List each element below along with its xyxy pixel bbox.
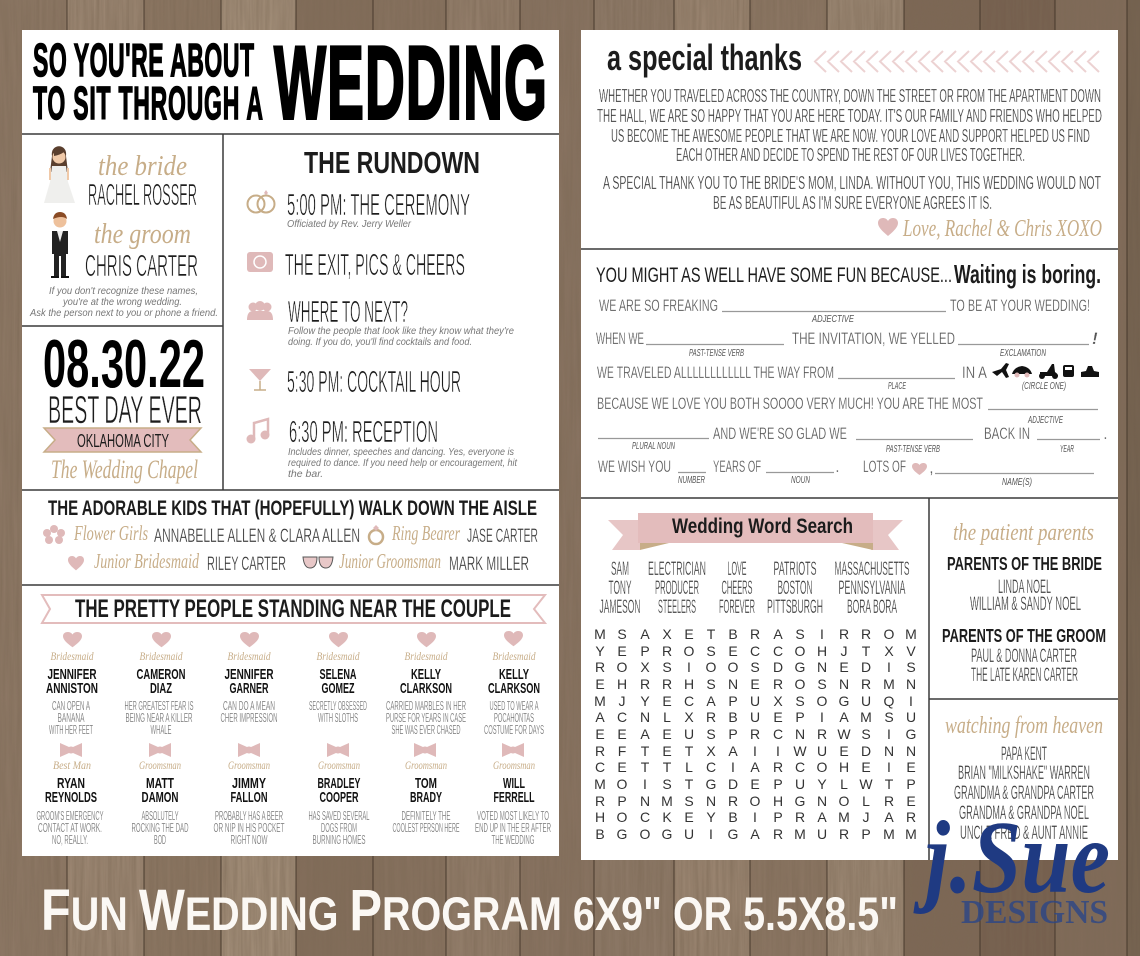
groomsman card 1: BOD bbox=[154, 833, 166, 847]
best man card: NO, REALLY. bbox=[52, 833, 88, 847]
icon: camera bbox=[247, 252, 273, 272]
bridesmaid card 2: CAMERON bbox=[136, 666, 186, 683]
bridesmaid card 4: Bridesmaid bbox=[316, 649, 360, 663]
line 5: PLURAL NOUN bbox=[632, 441, 675, 452]
panel: kids: JASE CARTER bbox=[467, 526, 538, 547]
bridesmaid card 1: WITH HER FEET bbox=[49, 723, 93, 737]
flower girls: Flower Girls bbox=[73, 521, 148, 545]
panel: wedding party: PURSE FOR YEARS IN CASE bbox=[386, 711, 466, 725]
thanks to mom bbox=[603, 173, 1101, 213]
panel: the rundown: 5:30 PM: COCKTAIL HOUR bbox=[287, 364, 461, 399]
groomsman card 1: MATT bbox=[146, 775, 174, 792]
line 5: AND WE'RE SO GLAD WE bbox=[713, 424, 847, 443]
panel: the rundown: 5:00 PM: THE CEREMONY bbox=[287, 187, 470, 222]
letter grid: ACNLXRBUEPIAMSU bbox=[595, 709, 916, 725]
line 2: EXCLAMATION bbox=[1000, 348, 1047, 359]
panel: the rundown: 6:30 PM: RECEPTION bbox=[289, 414, 438, 449]
groomsman card 5 bbox=[475, 743, 551, 847]
icon: flower bbox=[43, 525, 65, 544]
bridesmaid card 6: CLARKSON bbox=[488, 680, 540, 697]
panel: wedding party: GROOM'S EMERGENCY bbox=[36, 809, 104, 823]
line 2 bbox=[596, 329, 1098, 359]
reception note: the bar. bbox=[288, 468, 323, 480]
groomsman card 3: Groomsman bbox=[318, 758, 360, 772]
icon: heart bbox=[878, 218, 898, 236]
best man card: CONTACT AT WORK. bbox=[38, 821, 102, 835]
line 6: NAME(S) bbox=[1002, 477, 1032, 488]
line 3: (CIRCLE ONE) bbox=[1022, 381, 1066, 392]
junior bridesmaid: Junior Bridesmaid bbox=[94, 549, 199, 573]
title: WEDDING bbox=[274, 25, 547, 141]
line 6: . bbox=[835, 457, 840, 476]
bridesmaid card 3: CAN DO A MEAN bbox=[223, 699, 275, 713]
panel: mad libs bbox=[596, 259, 1108, 488]
title: TO SIT THROUGH A bbox=[33, 77, 263, 129]
heading: a special thanks bbox=[607, 37, 802, 78]
fill-in lines bbox=[598, 312, 1100, 474]
panel: left program page: RACHEL ROSSER bbox=[88, 177, 197, 212]
panel: wedding party: COOLEST PERSON HERE bbox=[392, 821, 460, 835]
letter grid bbox=[594, 626, 917, 842]
groomsman card 1: Groomsman bbox=[139, 758, 181, 772]
icon: martini bbox=[249, 369, 271, 390]
bridesmaid card 5: KELLY bbox=[411, 666, 441, 683]
heading: the patient parents bbox=[953, 520, 1094, 546]
line 2: THE INVITATION, WE YELLED bbox=[792, 329, 955, 348]
panel: right program page bbox=[581, 30, 1118, 860]
line 2: WHEN WE bbox=[596, 329, 644, 348]
groomsman card 2: JIMMY bbox=[232, 775, 266, 792]
word list: LOVE bbox=[728, 559, 746, 580]
bridesmaid card 6: USED TO WEAR A bbox=[490, 699, 539, 713]
groomsman card 2 bbox=[214, 743, 285, 847]
line 1: ADJECTIVE bbox=[811, 314, 854, 325]
icon: people bbox=[247, 301, 273, 320]
bridesmaid card 6: POCAHONTAS bbox=[494, 711, 534, 725]
line 2: PAST-TENSE VERB bbox=[689, 348, 744, 359]
panel: special thanks bbox=[597, 37, 1102, 242]
word list bbox=[600, 559, 910, 618]
groomsman card 3 bbox=[308, 743, 370, 847]
parents of the bride bbox=[947, 554, 1102, 615]
panel: wedding party: PROBABLY HAS A BEER bbox=[215, 809, 283, 823]
the bride label: the bride bbox=[98, 151, 187, 182]
panel: wedding party: CARRIED MARBLES IN HER bbox=[386, 699, 466, 713]
chevron row bbox=[815, 51, 1099, 72]
bridesmaid card 2: BEING NEAR A KILLER bbox=[126, 711, 192, 725]
line 2: ! bbox=[1092, 329, 1098, 348]
couple note bbox=[29, 285, 218, 319]
icon: bride bbox=[44, 146, 75, 203]
letter grid: YEPROSECCOHJTXV bbox=[595, 643, 916, 659]
icon: music note bbox=[246, 419, 270, 444]
panel: date and venue bbox=[43, 326, 205, 484]
panel: word search bbox=[594, 513, 917, 842]
panel: the patient parents bbox=[942, 520, 1106, 686]
names: PAPA KENT bbox=[1001, 744, 1047, 765]
heading: YOU MIGHT AS WELL HAVE SOME FUN BECAUSE... bbox=[596, 264, 952, 287]
letter grid: HOCKEYBIPRAMJAR bbox=[595, 809, 916, 825]
line 6: NUMBER bbox=[678, 475, 705, 486]
panel: the rundown: THE EXIT, PICS & CHEERS bbox=[285, 247, 465, 282]
word list: SAM bbox=[611, 559, 629, 580]
letter grid: EEAEUSPRCNRWSIG bbox=[595, 726, 916, 742]
letter grid: RFTETXAIIWUEDNN bbox=[595, 743, 916, 759]
icon: rings bbox=[248, 190, 274, 212]
groomsman card 1: DAMON bbox=[142, 789, 178, 806]
panel: wedding party: SHE WAS EVER CHASED bbox=[392, 723, 460, 737]
line 5 bbox=[632, 424, 1108, 455]
panel: wedding party: ROCKING THE DAD bbox=[132, 821, 188, 835]
heading: THE ADORABLE KIDS THAT (HOPEFULLY) WALK DOWN THE AISLE bbox=[48, 497, 537, 520]
bridesmaid card 1: CAN OPEN A bbox=[52, 699, 90, 713]
panel: watching from heaven bbox=[945, 713, 1103, 844]
panel: kids bbox=[43, 497, 538, 575]
groomsman card 5: VOTED MOST LIKELY TO bbox=[477, 809, 549, 823]
thank you message bbox=[597, 86, 1102, 165]
names bbox=[954, 744, 1094, 844]
bridesmaid card 4: WITH SLOTHS bbox=[318, 711, 358, 725]
line 6: , bbox=[929, 458, 934, 477]
groomsman card 4: Groomsman bbox=[405, 758, 447, 772]
bridesmaid card 2: DIAZ bbox=[150, 680, 172, 697]
letter grid: MOISTGDEPUYLWTP bbox=[594, 776, 916, 792]
couple note: If you don't recognize these names, bbox=[49, 285, 198, 297]
letter grid: CETTLCIARCOHEIE bbox=[595, 759, 916, 775]
groomsman card 2: OR NIP IN HIS POCKET bbox=[214, 821, 285, 835]
panel: kids: ANNABELLE ALLEN & CLARA ALLEN bbox=[154, 526, 360, 547]
bridesmaid card 6 bbox=[484, 631, 544, 737]
groomsman card 3: BRADLEY bbox=[318, 775, 360, 792]
panel: the rundown bbox=[246, 145, 518, 480]
panel: right program page: MASSACHUSETTS bbox=[834, 559, 910, 580]
bridesmaid card 5: CLARKSON bbox=[400, 680, 452, 697]
line 4 bbox=[597, 394, 1063, 426]
bridesmaid card 1: JENNIFER bbox=[48, 666, 97, 683]
title: SO YOU'RE ABOUT bbox=[33, 34, 254, 86]
letter grid: ROXSIOOSDGNEDIS bbox=[595, 659, 916, 675]
line 5: YEAR bbox=[1060, 444, 1074, 455]
groomsman card 5: WILL bbox=[503, 775, 525, 792]
parents of the bride: LINDA NOEL bbox=[998, 577, 1051, 598]
panel: couple: CHRIS CARTER bbox=[85, 248, 198, 283]
best man card bbox=[36, 743, 104, 847]
line 6: NOUN bbox=[791, 475, 810, 486]
ribbon: city bbox=[44, 428, 201, 452]
panel: wedding party: HAS SAVED SEVERAL bbox=[308, 809, 370, 823]
bridesmaid card 3: Bridesmaid bbox=[228, 649, 271, 663]
ring bearer: Ring Bearer bbox=[391, 521, 461, 545]
best man card: RYAN bbox=[57, 775, 85, 792]
groomsman card 5: FERRELL bbox=[494, 789, 534, 806]
junior groomsman: Junior Groomsman bbox=[339, 549, 441, 573]
bridesmaid card 5: Bridesmaid bbox=[404, 649, 448, 663]
ribbon: city: OKLAHOMA CITY bbox=[77, 431, 169, 451]
bridesmaid card 1: BANANA bbox=[58, 711, 85, 725]
line 3: IN A bbox=[962, 363, 988, 382]
ribbon heading bbox=[608, 513, 903, 550]
icon: ring bbox=[369, 525, 383, 544]
best man card: Best Man bbox=[53, 758, 91, 772]
panel: wedding party bbox=[36, 595, 551, 847]
panel: wedding party: CHER IMPRESSION bbox=[220, 711, 278, 725]
icons: transport options bbox=[992, 363, 1099, 379]
word list: BOSTON bbox=[778, 578, 812, 599]
directions note: Follow the people that look like they know what they're bbox=[288, 325, 514, 337]
bridesmaid card 6: Bridesmaid bbox=[492, 649, 536, 663]
line 4: ADJECTIVE bbox=[1027, 415, 1063, 426]
line 3 bbox=[597, 363, 1066, 392]
panel: word search: PENNSYLVANIA bbox=[838, 578, 906, 599]
panel: wedding party: COSTUME FOR DAYS bbox=[484, 723, 544, 737]
bridesmaid card 2: Bridesmaid bbox=[140, 649, 183, 663]
bridesmaid card 2 bbox=[124, 632, 194, 737]
line 1: WE ARE SO FREAKING bbox=[599, 296, 718, 315]
best man card: REYNOLDS bbox=[45, 789, 97, 806]
reception note: Includes dinner, speeches and dancing. Yes, everyone is bbox=[288, 446, 515, 458]
groomsman card 3: COOPER bbox=[320, 789, 359, 806]
panel: the rundown: WHERE TO NEXT? bbox=[288, 294, 408, 329]
letter grid: BGOGUIGARMURPMM bbox=[595, 826, 917, 842]
ribbon heading: Wedding Word Search bbox=[672, 515, 853, 538]
groomsman card 4: DEFINITELY THE bbox=[402, 809, 450, 823]
bridesmaid card 3: GARNER bbox=[230, 680, 269, 697]
panel: kids: MARK MILLER bbox=[449, 554, 529, 575]
panel: wedding party: SECRETLY OBSESSED bbox=[309, 699, 367, 713]
line 6: LOTS OF bbox=[863, 457, 906, 476]
heading: THE RUNDOWN bbox=[304, 145, 480, 180]
bridesmaid card 4: SELENA bbox=[320, 666, 357, 683]
letter grid: RPNMSNROHGNOLRE bbox=[595, 793, 916, 809]
directions note bbox=[288, 325, 514, 348]
word list: BORA BORA bbox=[847, 597, 897, 618]
reception note: required to dance. If you need help or encouragement, hit bbox=[288, 457, 518, 469]
bridesmaid card 2: WHALE bbox=[150, 723, 172, 737]
groomsman card 4: TOM bbox=[415, 775, 437, 792]
title bbox=[33, 25, 547, 141]
line 5: BACK IN bbox=[984, 424, 1030, 443]
the groom label: the groom bbox=[94, 219, 191, 250]
icon: groom bbox=[51, 212, 69, 277]
caption: product title: FUN WEDDING PROGRAM 6X9" OR 5.5X8.5" bbox=[41, 878, 898, 943]
tagline: BEST DAY EVER bbox=[48, 389, 202, 432]
groomsman card 5: Groomsman bbox=[493, 758, 535, 772]
groomsman card 3: DOGS FROM bbox=[321, 821, 357, 835]
groomsman card 2: RIGHT NOW bbox=[230, 833, 268, 847]
bridesmaid card 5 bbox=[386, 632, 466, 737]
word list: TONY bbox=[608, 578, 632, 599]
logo: j.Sue Designs: j.Sue bbox=[913, 800, 1110, 915]
panel: left program page bbox=[22, 25, 559, 856]
couple note: Ask the person next to you or phone a friend. bbox=[29, 307, 218, 319]
officiant: Officiated by Rev. Jerry Weller bbox=[287, 218, 411, 230]
groomsman card 5: THE WEDDING bbox=[492, 833, 534, 847]
date: 08.30.22 bbox=[43, 326, 205, 402]
icon: sunglasses bbox=[303, 557, 333, 568]
groomsman card 3: BURNING HOMES bbox=[312, 833, 366, 847]
groomsman card 1: ABSOLUTELY bbox=[142, 809, 179, 823]
panel: couple bbox=[29, 146, 218, 319]
word list: FOREVER bbox=[719, 597, 755, 618]
icon: heart bbox=[68, 556, 84, 570]
line 5: . bbox=[1103, 424, 1108, 443]
groomsman card 2: FALLON bbox=[230, 789, 268, 806]
panel: wedding party: HER GREATEST FEAR IS bbox=[124, 699, 194, 713]
word list: PITTSBURGH bbox=[767, 597, 823, 618]
word list: PRODUCER bbox=[655, 578, 699, 599]
bridesmaid card 1: Bridesmaid bbox=[50, 649, 94, 663]
line 1 bbox=[599, 296, 1090, 325]
logo: j.Sue Designs: DESIGNS bbox=[961, 894, 1108, 931]
bridesmaid card 3 bbox=[220, 632, 278, 725]
line 5: PAST-TENSE VERB bbox=[886, 444, 940, 455]
line 6: YEARS OF bbox=[713, 457, 761, 476]
letter grid: EHRRHSNEROSNRMN bbox=[595, 676, 916, 692]
groomsman card 4 bbox=[392, 743, 460, 835]
bridesmaid card 6: KELLY bbox=[499, 666, 529, 683]
bridesmaid card 1: ANNISTON bbox=[46, 680, 98, 697]
venue: The Wedding Chapel bbox=[51, 455, 198, 484]
bridesmaid card 4 bbox=[309, 632, 367, 725]
banner heading: THE PRETTY PEOPLE STANDING NEAR THE COUPLE bbox=[75, 595, 511, 623]
line 3: PLACE bbox=[888, 381, 906, 392]
word list: PATRIOTS bbox=[774, 559, 816, 580]
bridesmaid card 3: JENNIFER bbox=[224, 666, 274, 683]
panel: kids: RILEY CARTER bbox=[207, 554, 286, 575]
banner heading bbox=[42, 595, 545, 623]
letter grid: MSAXETBRASIRROM bbox=[594, 626, 917, 642]
line 3: WE TRAVELED ALLLLLLLLLLLL THE WAY FROM bbox=[597, 363, 834, 382]
parents of the groom bbox=[942, 626, 1106, 686]
word list: CHEERS bbox=[722, 578, 752, 599]
word list: STEELERS bbox=[658, 597, 696, 618]
couple note: you're at the wrong wedding. bbox=[62, 296, 182, 308]
word list: JAMESON bbox=[600, 597, 640, 618]
line 6 bbox=[598, 457, 1032, 488]
panel: left program page: END UP IN THE ER AFTER bbox=[475, 821, 551, 835]
directions note: doing. If you do, you'll find cocktails and food. bbox=[288, 336, 472, 348]
bridesmaid card 1 bbox=[46, 632, 98, 737]
groomsman card 1 bbox=[132, 743, 188, 847]
groomsman card 2: Groomsman bbox=[228, 758, 270, 772]
bridesmaid card 4: GOMEZ bbox=[322, 680, 354, 697]
groomsman card 4: BRADY bbox=[410, 789, 442, 806]
word list: ELECTRICIAN bbox=[648, 559, 706, 580]
reception note bbox=[288, 446, 518, 480]
letter grid: MJYECAPUXSOGUQI bbox=[594, 693, 913, 709]
line 6: WE WISH YOU bbox=[598, 457, 671, 476]
